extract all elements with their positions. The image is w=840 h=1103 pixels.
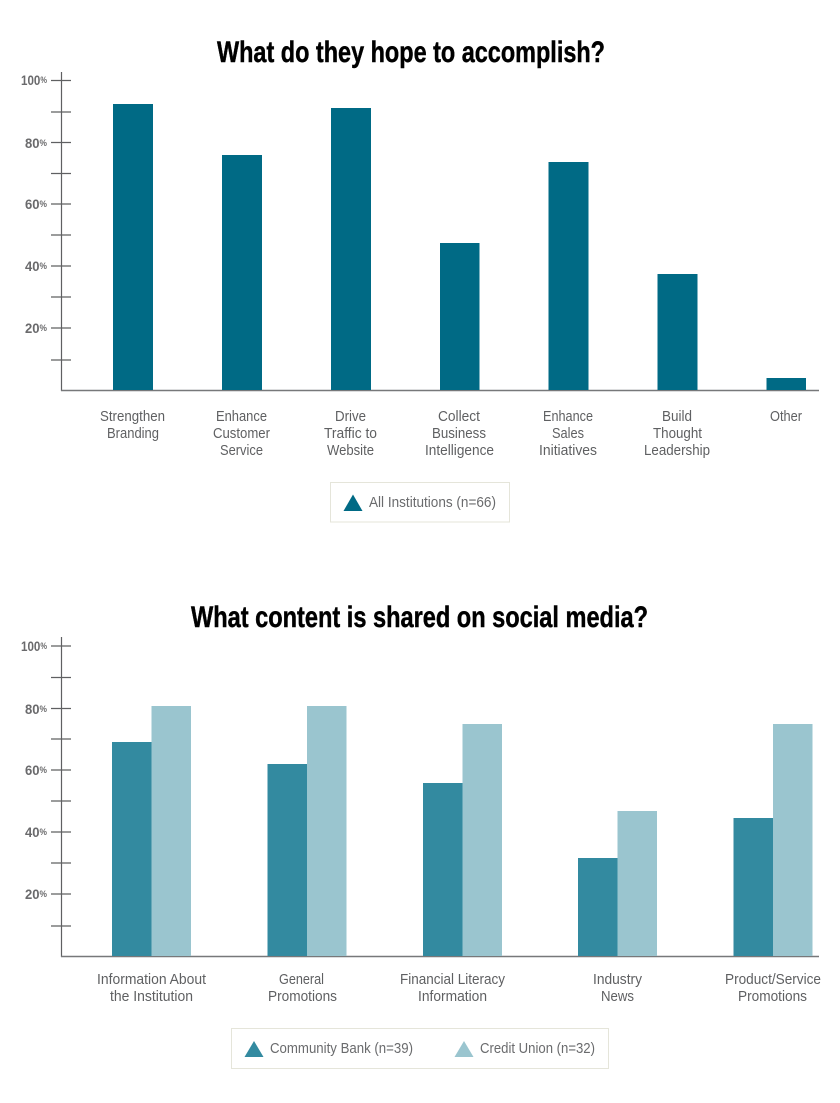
y axis labels: 60 <box>25 762 41 778</box>
y axis labels: % <box>40 323 47 333</box>
y axis labels: 80 <box>25 135 41 151</box>
category labels: Enhance <box>216 408 267 425</box>
y axis labels: 60 <box>25 196 41 212</box>
category labels: Enhance <box>543 408 593 425</box>
y axis labels: % <box>40 765 47 775</box>
y axis labels <box>21 638 47 902</box>
y axis labels <box>21 72 47 336</box>
y axis labels: 100 <box>21 638 44 654</box>
y axis labels: % <box>40 889 47 899</box>
category labels: Service <box>220 442 263 459</box>
category labels: Promotions <box>268 988 337 1005</box>
category labels: General <box>279 971 324 988</box>
y axis labels: 100 <box>21 72 44 88</box>
x axis <box>61 956 819 958</box>
category labels: the Institution <box>110 988 193 1005</box>
legend: all institutions: All Institutions (n=66) <box>369 494 496 511</box>
category labels: Traffic to <box>324 425 377 442</box>
y axis labels: 20 <box>25 886 41 902</box>
title: content chart: What content is shared on social media? <box>191 601 648 634</box>
y axis labels: 20 <box>25 320 41 336</box>
legend: community bank and credit union: Community Bank (n=39) <box>270 1040 413 1057</box>
y axis labels: 40 <box>25 258 41 274</box>
y axis labels: % <box>40 138 47 148</box>
category labels: Promotions <box>738 988 807 1005</box>
category labels: Customer <box>213 425 270 442</box>
category labels: Product/Service <box>725 971 821 988</box>
category labels: Information About <box>97 971 207 988</box>
legend: community bank and credit union <box>232 1028 608 1068</box>
y axis labels: % <box>40 261 47 271</box>
bars <box>113 104 806 390</box>
x axis <box>61 390 819 392</box>
y axis labels: 80 <box>25 701 41 717</box>
category labels: Build <box>662 408 692 425</box>
category labels: Strengthen <box>100 408 165 425</box>
bar chart: goals <box>21 72 819 459</box>
y axis labels: % <box>40 827 47 837</box>
category labels: Thought <box>653 425 703 442</box>
category labels <box>100 408 802 459</box>
category labels: Collect <box>438 408 481 425</box>
credit union bars <box>152 706 812 956</box>
title: accomplish chart: What do they hope to accomplish? <box>217 36 605 69</box>
category labels: Industry <box>593 971 642 988</box>
y axis with ticks <box>51 637 71 957</box>
category labels: Drive <box>335 408 366 425</box>
bar chart: content shared <box>21 637 821 1005</box>
y axis labels: % <box>40 199 47 209</box>
category labels: Intelligence <box>425 442 494 459</box>
category labels: Initiatives <box>539 442 597 459</box>
y axis labels: % <box>40 75 47 85</box>
legend: all institutions <box>330 482 510 522</box>
category labels: Sales <box>552 425 584 442</box>
category labels: Business <box>432 425 486 442</box>
category labels: Branding <box>107 425 159 442</box>
y axis labels: % <box>40 641 47 651</box>
category labels: Leadership <box>644 442 710 459</box>
category labels <box>97 971 821 1005</box>
category labels: Other <box>770 408 802 425</box>
category labels: News <box>601 988 634 1005</box>
legend: community bank and credit union: Credit Union (n=32) <box>480 1040 595 1057</box>
y axis with ticks <box>51 72 71 391</box>
y axis labels: % <box>40 704 47 714</box>
category labels: Information <box>418 988 487 1005</box>
category labels: Website <box>327 442 374 459</box>
category labels: Financial Literacy <box>400 971 505 988</box>
community bank bars <box>112 742 773 956</box>
y axis labels: 40 <box>25 824 41 840</box>
